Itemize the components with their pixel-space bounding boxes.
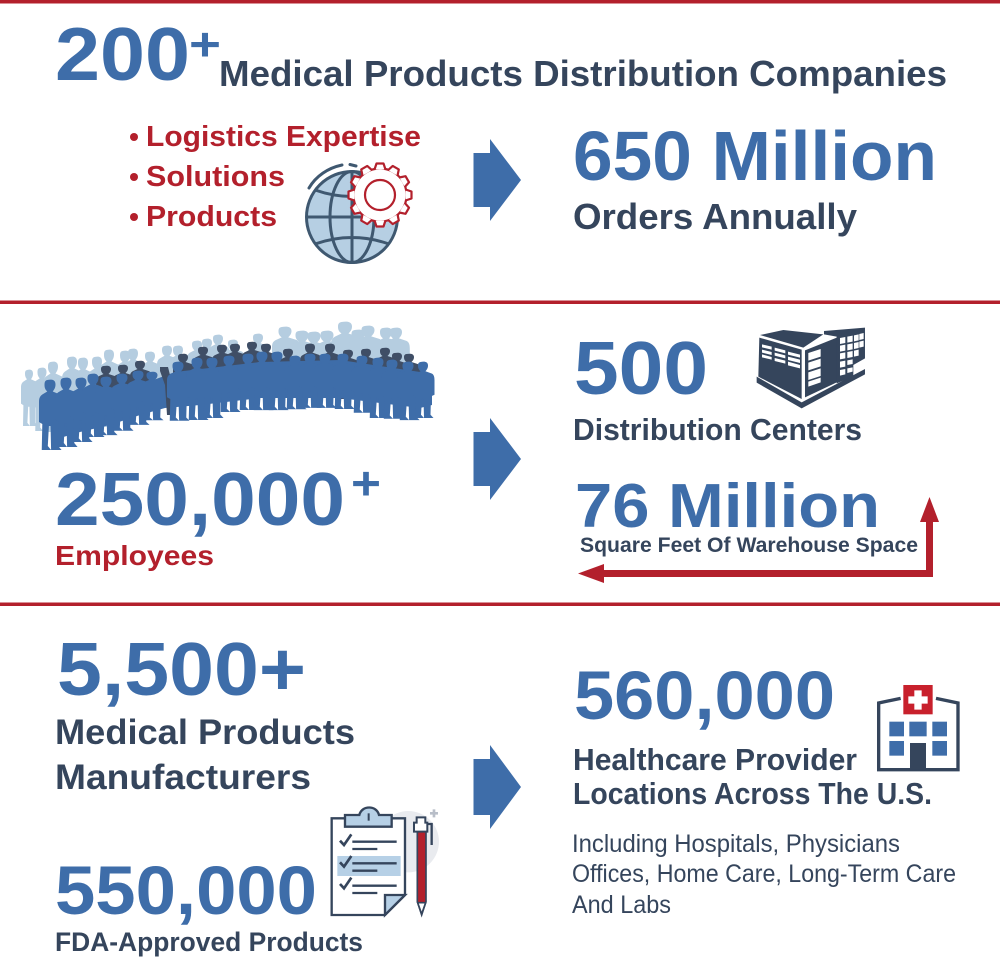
heading: 200+: 200 xyxy=(55,12,190,96)
label: medical products manufacturers: Medical Products xyxy=(55,713,355,752)
label: healthcare provider locations: Locations Across The U.S. xyxy=(573,776,932,811)
text block: provider types: Including Hospitals, Physicians xyxy=(572,830,900,858)
icon: clipboard and pen xyxy=(332,807,439,915)
icon: globe with gear xyxy=(306,164,412,263)
stat: 550,000: 550,000 xyxy=(55,852,317,929)
label: healthcare provider locations: Healthcare Provider xyxy=(573,742,857,777)
icon: distribution building xyxy=(757,328,865,408)
label: distribution centers: Distribution Centers xyxy=(573,412,862,447)
section divider: middle two xyxy=(0,602,1000,606)
text block: provider types xyxy=(572,830,956,919)
stat: 250,000+: + xyxy=(351,457,381,509)
front row, blue xyxy=(39,352,434,450)
heading: distribution companies: Medical Products Distribution Companies xyxy=(219,53,947,94)
stat: 5,500+: 5,500+ xyxy=(57,627,306,711)
panel: distribution companies xyxy=(55,12,947,263)
stat: 500: 500 xyxy=(574,326,708,410)
panel: manufacturers and providers xyxy=(55,627,958,957)
label: warehouse space: Square Feet Of Warehouse Space xyxy=(580,534,918,557)
icon: hospital xyxy=(879,685,958,770)
label: orders annually: Orders Annually xyxy=(573,196,857,237)
panel: workforce and facilities xyxy=(21,322,939,583)
text block: provider types: Offices, Home Care, Long-Term Care xyxy=(572,860,956,888)
middle row, dark xyxy=(96,342,420,415)
section divider: middle one xyxy=(0,300,1000,304)
label: fda-approved products: FDA-Approved Products xyxy=(55,927,363,957)
label: employees: Employees xyxy=(55,540,214,571)
stat: 560,000: 560,000 xyxy=(574,657,835,734)
arrow: section one xyxy=(474,139,521,221)
label: medical products manufacturers xyxy=(55,713,355,797)
arrow: section two xyxy=(474,418,521,500)
bullet list: capabilities xyxy=(130,121,421,233)
back row, light xyxy=(21,322,410,432)
illustration: crowd of employees xyxy=(21,322,434,450)
stat: 250,000+: 250,000 xyxy=(55,457,345,541)
label: medical products manufacturers: Manufacturers xyxy=(55,758,311,797)
bullet list: capabilities: Solutions xyxy=(146,161,285,193)
stat: 76 million: 76 Million xyxy=(575,472,880,541)
stat: 650 million: 650 Million xyxy=(573,117,937,195)
section divider: top xyxy=(0,0,1000,4)
label: healthcare provider locations xyxy=(573,742,932,811)
arrow: red corner arrow xyxy=(578,497,939,583)
bullet list: capabilities: Logistics Expertise xyxy=(146,121,421,153)
bullet list: capabilities: Products xyxy=(146,201,277,233)
heading: 200+: + xyxy=(189,18,221,70)
arrow: section three xyxy=(474,745,521,829)
text block: provider types: And Labs xyxy=(572,891,671,919)
